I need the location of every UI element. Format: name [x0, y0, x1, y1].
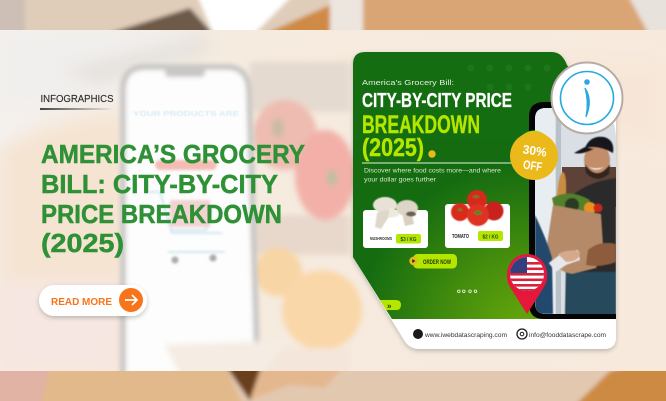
read more button: READ MORE: [51, 296, 112, 308]
sub: blurred oranges: [256, 246, 365, 352]
sub: blurred phone: [123, 64, 258, 390]
icon: arrow: [119, 288, 143, 312]
product: mushroom: [363, 197, 428, 248]
category label: INFOGRAPHICS: [40, 93, 114, 105]
category label: [40, 93, 114, 110]
sub: groceries: [547, 172, 603, 274]
discount badge: [510, 130, 558, 180]
sub: customer arm: [535, 215, 616, 314]
yellow dot: [428, 150, 436, 158]
promo card: [353, 52, 622, 349]
read more button: [39, 285, 147, 316]
sub: blurred box flap: [166, 339, 275, 371]
product: tomato: TOMATO: [452, 234, 469, 240]
sub: blurred screen text: YOUR PRODUCTS ARE: [133, 109, 239, 118]
blurred photo strip: bottom: [0, 371, 666, 401]
sub: blurred red peppers: [253, 100, 355, 220]
main heading: AMERICA’S GROCERY: [41, 139, 305, 169]
card description: your dollar goes further: [364, 176, 436, 184]
phone with delivery photo: [529, 102, 620, 320]
main heading: (2025): [41, 228, 124, 258]
main heading: PRICE BREAKDOWN: [41, 199, 282, 229]
product: tomato: [445, 190, 510, 248]
card title line 2: BREAKDOWN: [362, 111, 480, 139]
discount badge: 30%: [522, 142, 548, 160]
decorative dot grid: [468, 64, 550, 90]
icon: tomatoes: [451, 190, 504, 226]
footer website: [413, 329, 507, 339]
card footer base: [353, 52, 616, 349]
card description: Discover where food costs more—and where: [364, 168, 502, 174]
discount badge: OFF: [522, 158, 543, 174]
product: mushroom: MUSHROOMS: [370, 236, 392, 241]
logo circle: [552, 62, 622, 134]
order now button: [409, 254, 457, 268]
footer email: info@fooddatascrape.com: [529, 332, 606, 339]
icon: mushrooms: [373, 197, 418, 229]
card kicker: America's Grocery Bill:: [362, 78, 454, 87]
arrows pill: [380, 300, 401, 310]
card description: [364, 168, 502, 184]
main heading: BILL: CITY-BY-CITY: [41, 169, 278, 199]
card green panel: [353, 52, 600, 319]
product: mushroom: $3 / KG: [400, 237, 416, 243]
footer email: [517, 329, 606, 339]
sub: blurred cart: [148, 160, 225, 264]
pagination dots: [458, 290, 477, 293]
card title line 1: CITY-BY-CITY PRICE: [362, 89, 512, 112]
footer website: www.iwebdatascraping.com: [424, 332, 507, 339]
blurred photo strip: top: [0, 0, 666, 30]
sub: delivery man: [565, 137, 616, 320]
card title line 3: (2025): [362, 134, 424, 162]
photo scene: [535, 105, 620, 320]
product: tomato: $2 / KG: [482, 234, 498, 240]
arrows pill: »: [387, 302, 392, 310]
divider: [362, 162, 517, 164]
main heading: [41, 139, 305, 258]
order now button: ORDER NOW: [423, 260, 451, 266]
map pin with US flag: [507, 254, 547, 314]
